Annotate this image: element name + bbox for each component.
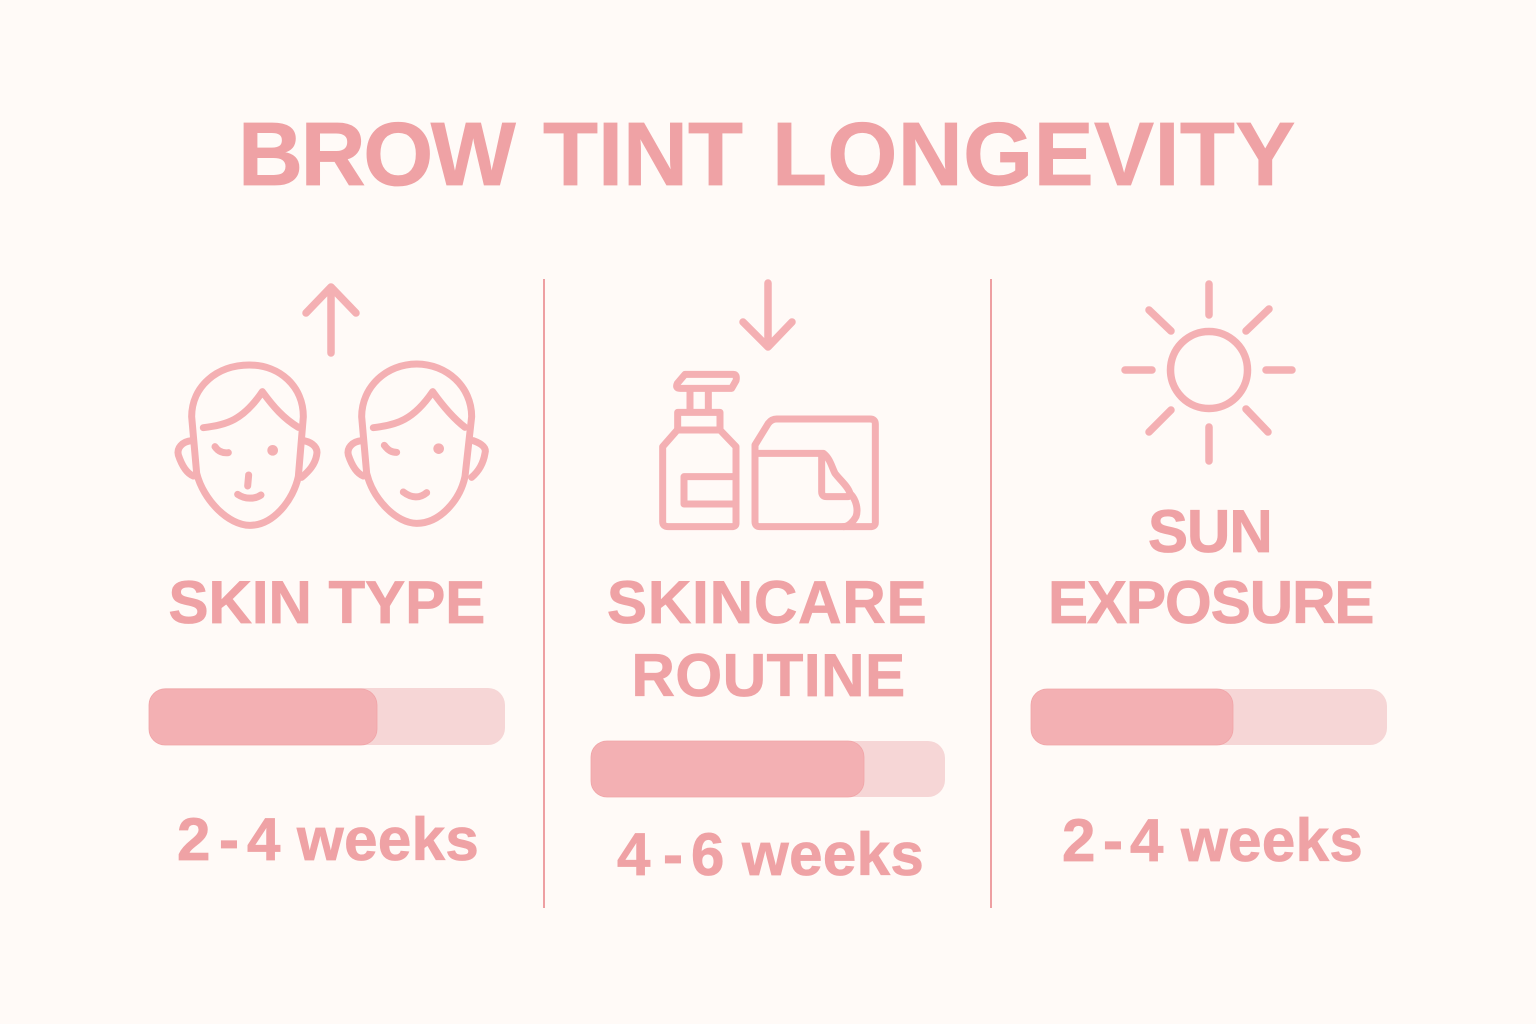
value: skin type: 4 xyxy=(247,806,281,873)
icon: bottle and jar xyxy=(663,374,875,527)
value: skin type: weeks xyxy=(296,806,479,873)
title: TINT xyxy=(543,105,743,205)
value: sun exposure: 4 xyxy=(1130,807,1164,874)
value: sun exposure: weeks xyxy=(1180,807,1363,874)
heading: sun exposure: EXPOSURE xyxy=(1048,569,1373,636)
heading: skin type: SKIN TYPE xyxy=(168,569,485,636)
value: skincare routine: 4 xyxy=(617,821,651,888)
heading: skincare routine: SKINCARE xyxy=(607,569,928,636)
panel: skin type xyxy=(149,287,505,873)
icon: sun xyxy=(1125,284,1292,461)
title: BROW xyxy=(238,105,516,205)
arrow: down xyxy=(743,283,792,347)
panel: sun exposure xyxy=(1031,284,1387,874)
value: skin type: - xyxy=(219,806,239,873)
value: sun exposure: 2 xyxy=(1062,807,1095,874)
bar: skincare routine xyxy=(591,741,945,797)
heading: skincare routine: ROUTINE xyxy=(632,642,906,709)
value: skincare routine: 6 xyxy=(691,821,724,888)
icon: two faces xyxy=(178,364,485,525)
title: LONGEVITY xyxy=(772,105,1296,205)
bar: skin type xyxy=(149,688,505,745)
bar: sun exposure xyxy=(1031,689,1387,745)
heading: sun exposure: SUN xyxy=(1148,498,1272,565)
value: sun exposure: - xyxy=(1103,807,1123,874)
value: skincare routine: weeks xyxy=(741,821,924,888)
arrow: up xyxy=(306,287,356,353)
panel: skincare routine xyxy=(591,283,945,888)
value: skincare routine: - xyxy=(663,821,683,888)
value: skin type: 2 xyxy=(177,806,210,873)
